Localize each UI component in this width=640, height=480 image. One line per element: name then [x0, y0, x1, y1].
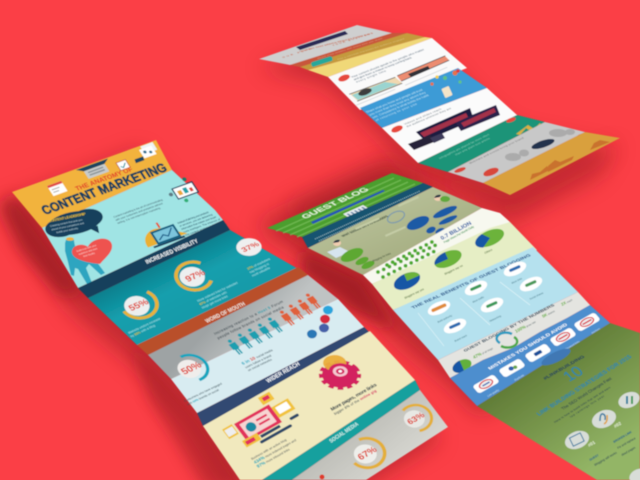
strategy number labels — [587, 421, 622, 448]
icon: gray clouds — [505, 129, 575, 161]
panel: gray stats — [292, 390, 448, 480]
stat text: 37: most valuable — [251, 266, 271, 278]
bubble text: builds your authority — [56, 227, 79, 234]
stat value 37%: 37% — [239, 240, 262, 254]
icon: red oval — [506, 116, 516, 124]
blue band text — [365, 88, 433, 122]
green band text: Infographics are shared far more often — [438, 133, 491, 160]
panel: orange band — [483, 132, 620, 195]
heading: mistakes: MISTAKES YOU SHOULD AVOID — [487, 322, 570, 371]
panel: green link building — [477, 323, 640, 480]
strategy number labels: #01 — [587, 440, 596, 448]
benefit captions — [437, 277, 545, 343]
panel: pale green — [372, 222, 537, 310]
caption lines — [356, 67, 448, 106]
icon: mountains — [516, 123, 542, 135]
orange tree silhouettes — [530, 140, 610, 180]
text block: right: or services, you are delivering — [178, 212, 214, 228]
olive small text: Blogging for traffic — [377, 256, 398, 269]
pie captions: Bloggers say no — [444, 263, 464, 276]
mistake captions: Keyword links — [564, 339, 581, 351]
mistake tag 5 — [573, 312, 601, 332]
icon: twitter — [323, 306, 333, 314]
top text lines: CONTENT THAT BRINGS RESULTS EVERY DAY — [298, 33, 372, 52]
sheet: content marketing infographic (left) — [12, 140, 448, 480]
orange band text: Reach more readers with every post you share — [317, 37, 384, 59]
icon: papers — [137, 142, 159, 158]
white lower text: Videos and slides reach — [403, 107, 443, 126]
icon: head bulb — [66, 237, 74, 241]
benefit captions: Brand reach — [454, 334, 468, 343]
benefit captions: Networking — [489, 314, 502, 323]
panel: cream section — [203, 331, 415, 480]
stat text: 97: More indexed links for websites — [196, 281, 239, 303]
text: 434% stats: Business with an active blog — [250, 438, 288, 461]
strategy number labels: #02 — [613, 421, 622, 429]
strategy captions: Fix and replace — [616, 436, 637, 450]
small copy: Here is how to build links that last and earn — [553, 386, 612, 424]
heart text: their loyalty — [83, 252, 96, 258]
panel: orange band — [290, 33, 407, 67]
heading: the anatomy of: THE ANATOMY OF — [74, 166, 134, 193]
text: 434% stats: 97% more inbound links — [256, 447, 291, 469]
band: increased visibility — [78, 220, 230, 298]
text: word of mouth copy: people follow brands on social media — [216, 305, 285, 340]
panel: olive section — [308, 187, 482, 275]
strategy icon 2 — [589, 406, 619, 432]
strategy captions: GUEST — [588, 453, 600, 462]
heading: numbers: GUEST BLOGGING BY THE NUMBERS — [462, 303, 556, 353]
pie captions: Others — [484, 247, 494, 255]
panel: gray top — [259, 25, 392, 65]
band: word of mouth — [137, 267, 308, 355]
blue band text: you more than they trust any advert they — [368, 91, 427, 116]
icon: laptop chart — [137, 216, 189, 250]
band: navy strip — [302, 183, 433, 248]
stat ring: 67% — [338, 429, 396, 477]
panel: blue band — [360, 68, 487, 128]
panel: white upper — [328, 38, 467, 110]
blue band text: Share what you know and people will trust — [365, 88, 424, 114]
text block: intro — [112, 198, 168, 225]
panel: green band — [418, 115, 545, 172]
icon: laptop header — [76, 158, 115, 181]
mistake captions: Duplicate — [514, 373, 525, 382]
strip dots — [315, 191, 424, 241]
pie captions: Bloggers say yes — [404, 287, 425, 300]
subheading: The SEO World Changes Fast — [560, 376, 613, 411]
text: 434% stats: 434% more indexed pages and — [253, 437, 297, 465]
stat text: 37: say blogging is — [249, 262, 270, 274]
strategy icon 4 — [627, 466, 640, 480]
stat value 55%: 55% — [127, 297, 152, 314]
stat text: 50: with 50% brands on social — [186, 388, 220, 406]
image: orange — [397, 56, 450, 82]
stat text: 6 in 10: on social networks — [247, 358, 273, 372]
mistake captions: Spam — [542, 358, 549, 365]
mistake tag 1 — [472, 374, 500, 394]
benefit captions: Build authority — [437, 314, 453, 324]
sheet: guest blogging infographic (middle) — [267, 173, 640, 480]
benefit captions: More traffic — [472, 295, 485, 304]
number captions: 100% grow rate — [514, 319, 537, 334]
icon: linkedin — [307, 330, 317, 338]
stat text: 55: by 55% with a blog — [130, 324, 156, 338]
panel: pale strip — [308, 37, 432, 77]
heart text — [76, 244, 101, 259]
panel: aqua intro — [42, 170, 223, 288]
text: 434% stats — [250, 434, 300, 469]
stat text: 97: blogs get more links — [201, 294, 229, 310]
button: teal — [311, 56, 333, 67]
panel: pale blue section — [171, 299, 364, 413]
small copy: top rankings this year — [569, 394, 605, 418]
strategy captions: dead pages — [620, 445, 637, 457]
icon grid: green figures — [378, 242, 437, 277]
icon: person face left — [327, 240, 350, 258]
text block: intro: Content marketing is the art of communicating — [112, 198, 164, 219]
icon: stadium — [343, 205, 369, 218]
text block: right: more intelligent. The essence of — [182, 217, 221, 234]
stat value 50%: 50% — [179, 360, 204, 377]
blue band text: see. Consistency is what builds the habit — [371, 94, 430, 119]
image: beach — [349, 77, 402, 102]
bubble title: CONTENT LEADERSHIP — [48, 212, 87, 223]
mistake captions: Anchors — [590, 326, 601, 335]
panel: blue mistakes — [450, 305, 610, 406]
olive label: WHAT GOOGLE SAYS VS BLOGGERS — [341, 215, 390, 238]
white upper text: Your content should speak to the people who matter — [350, 48, 425, 79]
band label: WIDER REACH — [265, 361, 302, 385]
title: GUEST BLOG — [299, 186, 371, 220]
top text lines: YOUR BUSINESS — [331, 32, 374, 46]
icon: monitor cluster — [163, 176, 201, 206]
top text lines: OUR PLAN — [281, 48, 312, 58]
stat text: 6 in 10: users follow a brand — [244, 354, 273, 369]
mistake captions — [486, 326, 601, 398]
heart text: audience and earn — [78, 247, 99, 256]
stat value 63%: 63% — [405, 410, 427, 426]
text: more pages: More pages, more links — [330, 382, 379, 413]
text block: right: information that makes your buyer — [180, 215, 217, 231]
bubble text: ahead of your competitors and — [51, 222, 85, 231]
mistake captions: Low quality — [486, 388, 500, 398]
icon: facebook — [319, 324, 329, 332]
figure: person — [65, 237, 105, 284]
bubble text: Creating content that puts you — [50, 218, 84, 228]
text: more pages: bigger 8% of the online gig — [333, 389, 377, 416]
white upper text: and give them a reason to keep coming back — [352, 56, 413, 81]
icon: person face right — [434, 195, 450, 202]
pie: numbers — [450, 356, 474, 376]
text: word of mouth copy: Increasing reaction to a Host 5 Forum — [213, 300, 284, 336]
blue band text: of returning to your site — [374, 102, 418, 122]
pie chart — [432, 246, 464, 272]
top graphic: navy strip — [296, 31, 348, 50]
stat text: 55: Website visitors increase — [127, 317, 161, 335]
stat text: 97: 97% of websites with — [199, 290, 228, 306]
stat text: 50: Consumers who have engaged — [183, 382, 223, 403]
text block: right: that if we deliver consistent value — [186, 222, 228, 240]
field stripes — [276, 178, 415, 237]
panel: white strip — [363, 208, 510, 284]
stat value 97%: 97% — [183, 268, 208, 284]
text block: right — [176, 207, 230, 243]
number captions: 47% of all blogs — [472, 345, 494, 360]
stat text: 6 in 10 — [240, 348, 279, 372]
panel: gray band — [448, 122, 585, 183]
heart text: Build trust with your — [76, 244, 97, 253]
image: dark screens — [408, 105, 500, 150]
number captions: 2X reach — [560, 297, 574, 307]
olive small text — [372, 251, 398, 269]
icon: navy cluster — [531, 137, 555, 151]
heading: content marketing: CONTENT MARKETING — [39, 160, 170, 218]
olive small text: Blogging for links — [372, 251, 392, 263]
heart — [72, 239, 112, 264]
mistake tag 4 — [549, 327, 577, 347]
gray text: Webinars and events bring your brand — [468, 136, 525, 165]
band label: INCREASED VISIBILITY — [144, 238, 200, 266]
icon: google — [320, 315, 330, 323]
top text lines — [281, 32, 374, 58]
benefit captions: Social shares — [529, 291, 545, 301]
stat: 0.7 billion: 0.7 BILLION — [440, 221, 473, 242]
icon: clipboard — [116, 160, 130, 171]
logo ring — [386, 209, 406, 225]
stat ring: 97% — [159, 249, 229, 303]
band: social media — [262, 380, 420, 480]
icon: red ovals — [454, 132, 586, 178]
benefit captions: More links — [511, 277, 523, 285]
blue ellipses — [405, 204, 458, 235]
band label: WORD OF MOUTH — [205, 302, 247, 325]
bubble text — [50, 218, 86, 235]
panel: mustard band — [300, 33, 425, 70]
band: wider reach — [197, 327, 372, 426]
illustration: desktop and cards — [216, 386, 304, 455]
tag: linkbuilding: #LINKBUILDING — [542, 354, 587, 381]
panel: yellow header — [12, 140, 172, 228]
mustard band text: Plan a schedule that keeps the audience engaged — [337, 38, 406, 60]
stat ring: 55% — [105, 278, 173, 330]
stat: 37% — [232, 235, 266, 259]
icon: red circle — [390, 124, 404, 134]
icon: recycle arrows — [497, 333, 517, 348]
olive light blocks — [355, 196, 419, 237]
pie chart — [472, 225, 507, 251]
panel: green field header — [267, 173, 423, 237]
strategy captions: BROKEN LINK — [612, 430, 633, 444]
icon: red circle — [337, 73, 351, 83]
panel: white lower — [382, 88, 517, 163]
icon cluster — [430, 69, 462, 98]
icon: pen cup — [135, 156, 144, 163]
stat caption: Page Views Per Month Daily — [443, 225, 475, 244]
pie captions — [404, 247, 494, 300]
text block: right: they reward us. — [188, 229, 219, 243]
speech bubble: content leadership — [41, 206, 108, 243]
strategy icon 1 — [562, 427, 592, 453]
stat ring: 63% — [388, 395, 444, 441]
white upper text: every single time — [355, 69, 387, 83]
icon: notepad — [47, 181, 68, 196]
benefit ovals — [426, 259, 544, 336]
strategy captions: Blogging still works — [594, 450, 618, 467]
stat ring: 50% — [168, 350, 214, 386]
text block: intro: selling. It is non-interruption marketing. — [116, 206, 162, 225]
stat text: 97 — [196, 281, 244, 310]
strategy captions — [588, 430, 637, 467]
stat text: 6 in 10: 6 in 10 social media — [240, 348, 274, 366]
strategy icon 3 — [616, 389, 640, 411]
panel: teal stats — [88, 230, 300, 345]
grid lines — [418, 282, 530, 346]
blue title bar — [311, 190, 385, 224]
panel: gray numbers — [438, 292, 590, 378]
green band text: than any plain text article — [454, 137, 491, 156]
band label: SOCIAL MEDIA — [329, 422, 360, 445]
text block: right: Instead of pitching your products — [176, 210, 210, 225]
mistake tag 3 — [524, 343, 552, 363]
heading: benefits: THE REAL BENEFITS OF GUEST BLOGGING — [410, 253, 532, 310]
icon: small red mark — [320, 474, 324, 480]
text block: intro: with your customers and prospects without — [114, 201, 164, 222]
panel: light blue benefits — [393, 247, 578, 360]
icon: gear — [309, 351, 365, 392]
stat text: 37 — [246, 257, 276, 278]
icon row: people — [226, 292, 322, 355]
text block: right: this content strategy is the belief — [184, 220, 224, 237]
stat value 67%: 67% — [356, 444, 380, 463]
number captions: 5K shares — [541, 308, 556, 319]
big number 10: 10 — [560, 364, 587, 385]
green ellipses — [339, 245, 376, 271]
white lower text: the audience wherever they are — [405, 107, 453, 128]
number captions — [472, 297, 574, 360]
panel: gray section — [148, 275, 338, 379]
stat text: 37: 37% of marketers — [246, 257, 271, 271]
blue wave overlap — [539, 345, 573, 369]
pie chart — [391, 268, 423, 294]
sheet: top infographic (right) — [259, 25, 620, 195]
mistake tag 2 — [498, 358, 526, 378]
